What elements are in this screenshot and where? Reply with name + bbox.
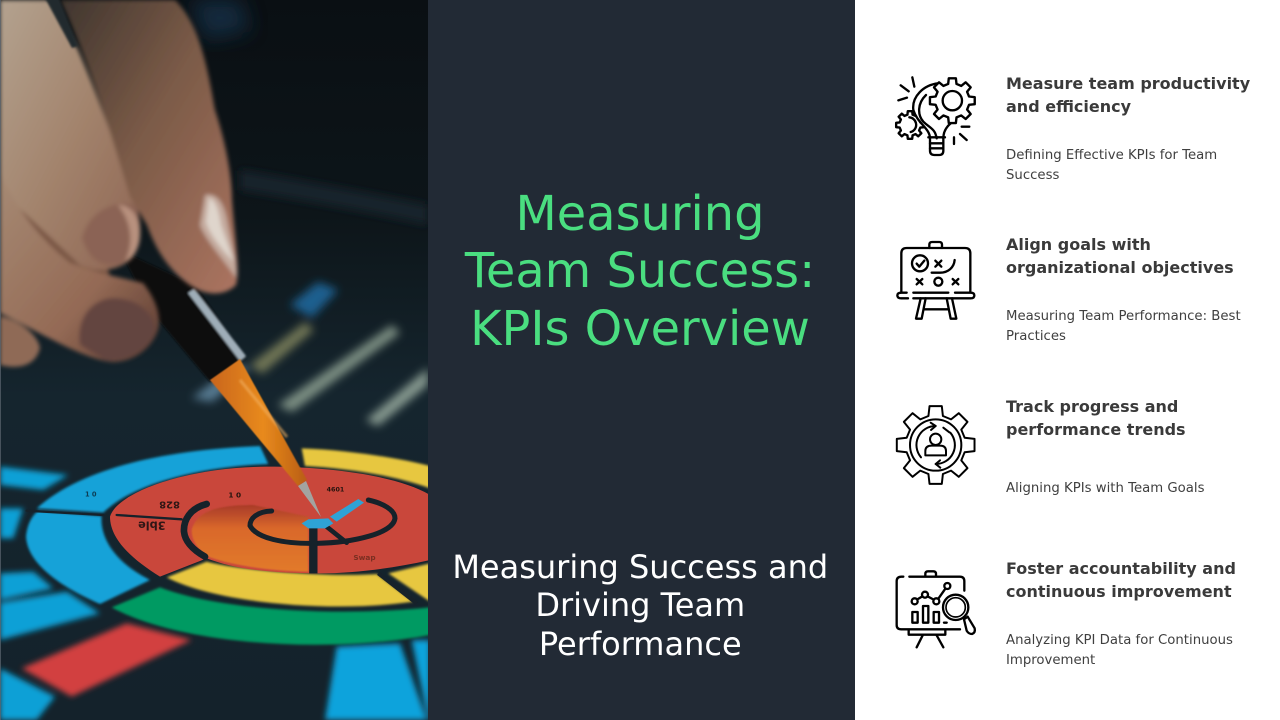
heading: item 3: Track progress and: [1006, 397, 1178, 416]
dial and chart segments: Swap: [353, 553, 376, 562]
heading: item 1: Measure team productivity: [1006, 74, 1250, 93]
small dial labels: 1 0: [228, 490, 241, 499]
panel: centre title panel: [428, 0, 855, 720]
text: item 2: Practices: [1006, 329, 1066, 344]
title: KPIs Overview: [470, 302, 810, 357]
pencil: [120, 250, 321, 517]
icon: person inside gear: [896, 405, 976, 485]
text: item 4: Improvement: [1006, 653, 1095, 668]
text: item 2: Measuring Team Performance: Best: [1006, 309, 1241, 324]
icon: strategy board on easel: [896, 240, 976, 320]
lower finger: [0, 173, 159, 362]
icon: presentation chart with magnifier: [896, 570, 976, 648]
subtitle: Driving Team: [535, 586, 745, 624]
heading: item 2: [1006, 235, 1234, 277]
blue rings: [37, 446, 268, 513]
green ring: [112, 587, 430, 645]
heading: item 1: and efficiency: [1006, 97, 1131, 116]
subtitle: Performance: [539, 625, 742, 663]
text: item 3: Aligning KPIs with Team Goals: [1006, 481, 1205, 496]
hand fingers: [0, 0, 237, 367]
dial and chart segments: [0, 446, 430, 720]
dial and chart segments: 828: [159, 498, 180, 509]
subtitle: [452, 548, 828, 663]
text: item 2: [1006, 309, 1241, 344]
yellow lower ring: [167, 562, 413, 606]
text: item 1: Defining Effective KPIs for Team: [1006, 148, 1217, 163]
text: item 4: [1006, 633, 1233, 668]
icon: light bulb with gears: [894, 76, 976, 156]
heading: item 3: [1006, 397, 1186, 439]
title: [464, 186, 815, 357]
yellow top ring: [302, 448, 430, 488]
dial black lines: [27, 500, 417, 603]
dial needle: [302, 518, 333, 528]
second finger with nail: [60, 0, 237, 293]
red disc: [110, 467, 430, 577]
subtitle: Measuring Success and: [452, 548, 828, 586]
text: item 1: [1006, 148, 1217, 183]
dial and chart segments: 1 0: [85, 491, 97, 499]
text: item 4: Analyzing KPI Data for Continuous: [1006, 633, 1233, 648]
orange ring: [192, 505, 308, 572]
title: Team Success:: [465, 244, 815, 299]
heading: item 2: organizational objectives: [1006, 258, 1234, 277]
title: Measuring: [516, 186, 764, 242]
heading: item 4: continuous improvement: [1006, 582, 1232, 601]
hand base: [0, 150, 110, 275]
panel: KPI list: [855, 0, 1280, 720]
heading: item 3: performance trends: [1006, 420, 1186, 439]
heading: item 1: [1006, 74, 1250, 116]
photo: hand pointing a pencil at a KPI dial: [0, 0, 428, 720]
background streaks: [190, 0, 428, 426]
dial and chart segments: 4601: [327, 487, 344, 494]
pencil upper end: [44, 0, 78, 48]
text: item 1: Success: [1006, 168, 1059, 183]
heading: item 4: [1006, 559, 1236, 601]
heading: item 4: Foster accountability and: [1006, 559, 1236, 578]
middle finger: [0, 0, 140, 270]
dial and chart segments: 3ble: [138, 518, 166, 532]
heading: item 2: Align goals with: [1006, 235, 1151, 254]
